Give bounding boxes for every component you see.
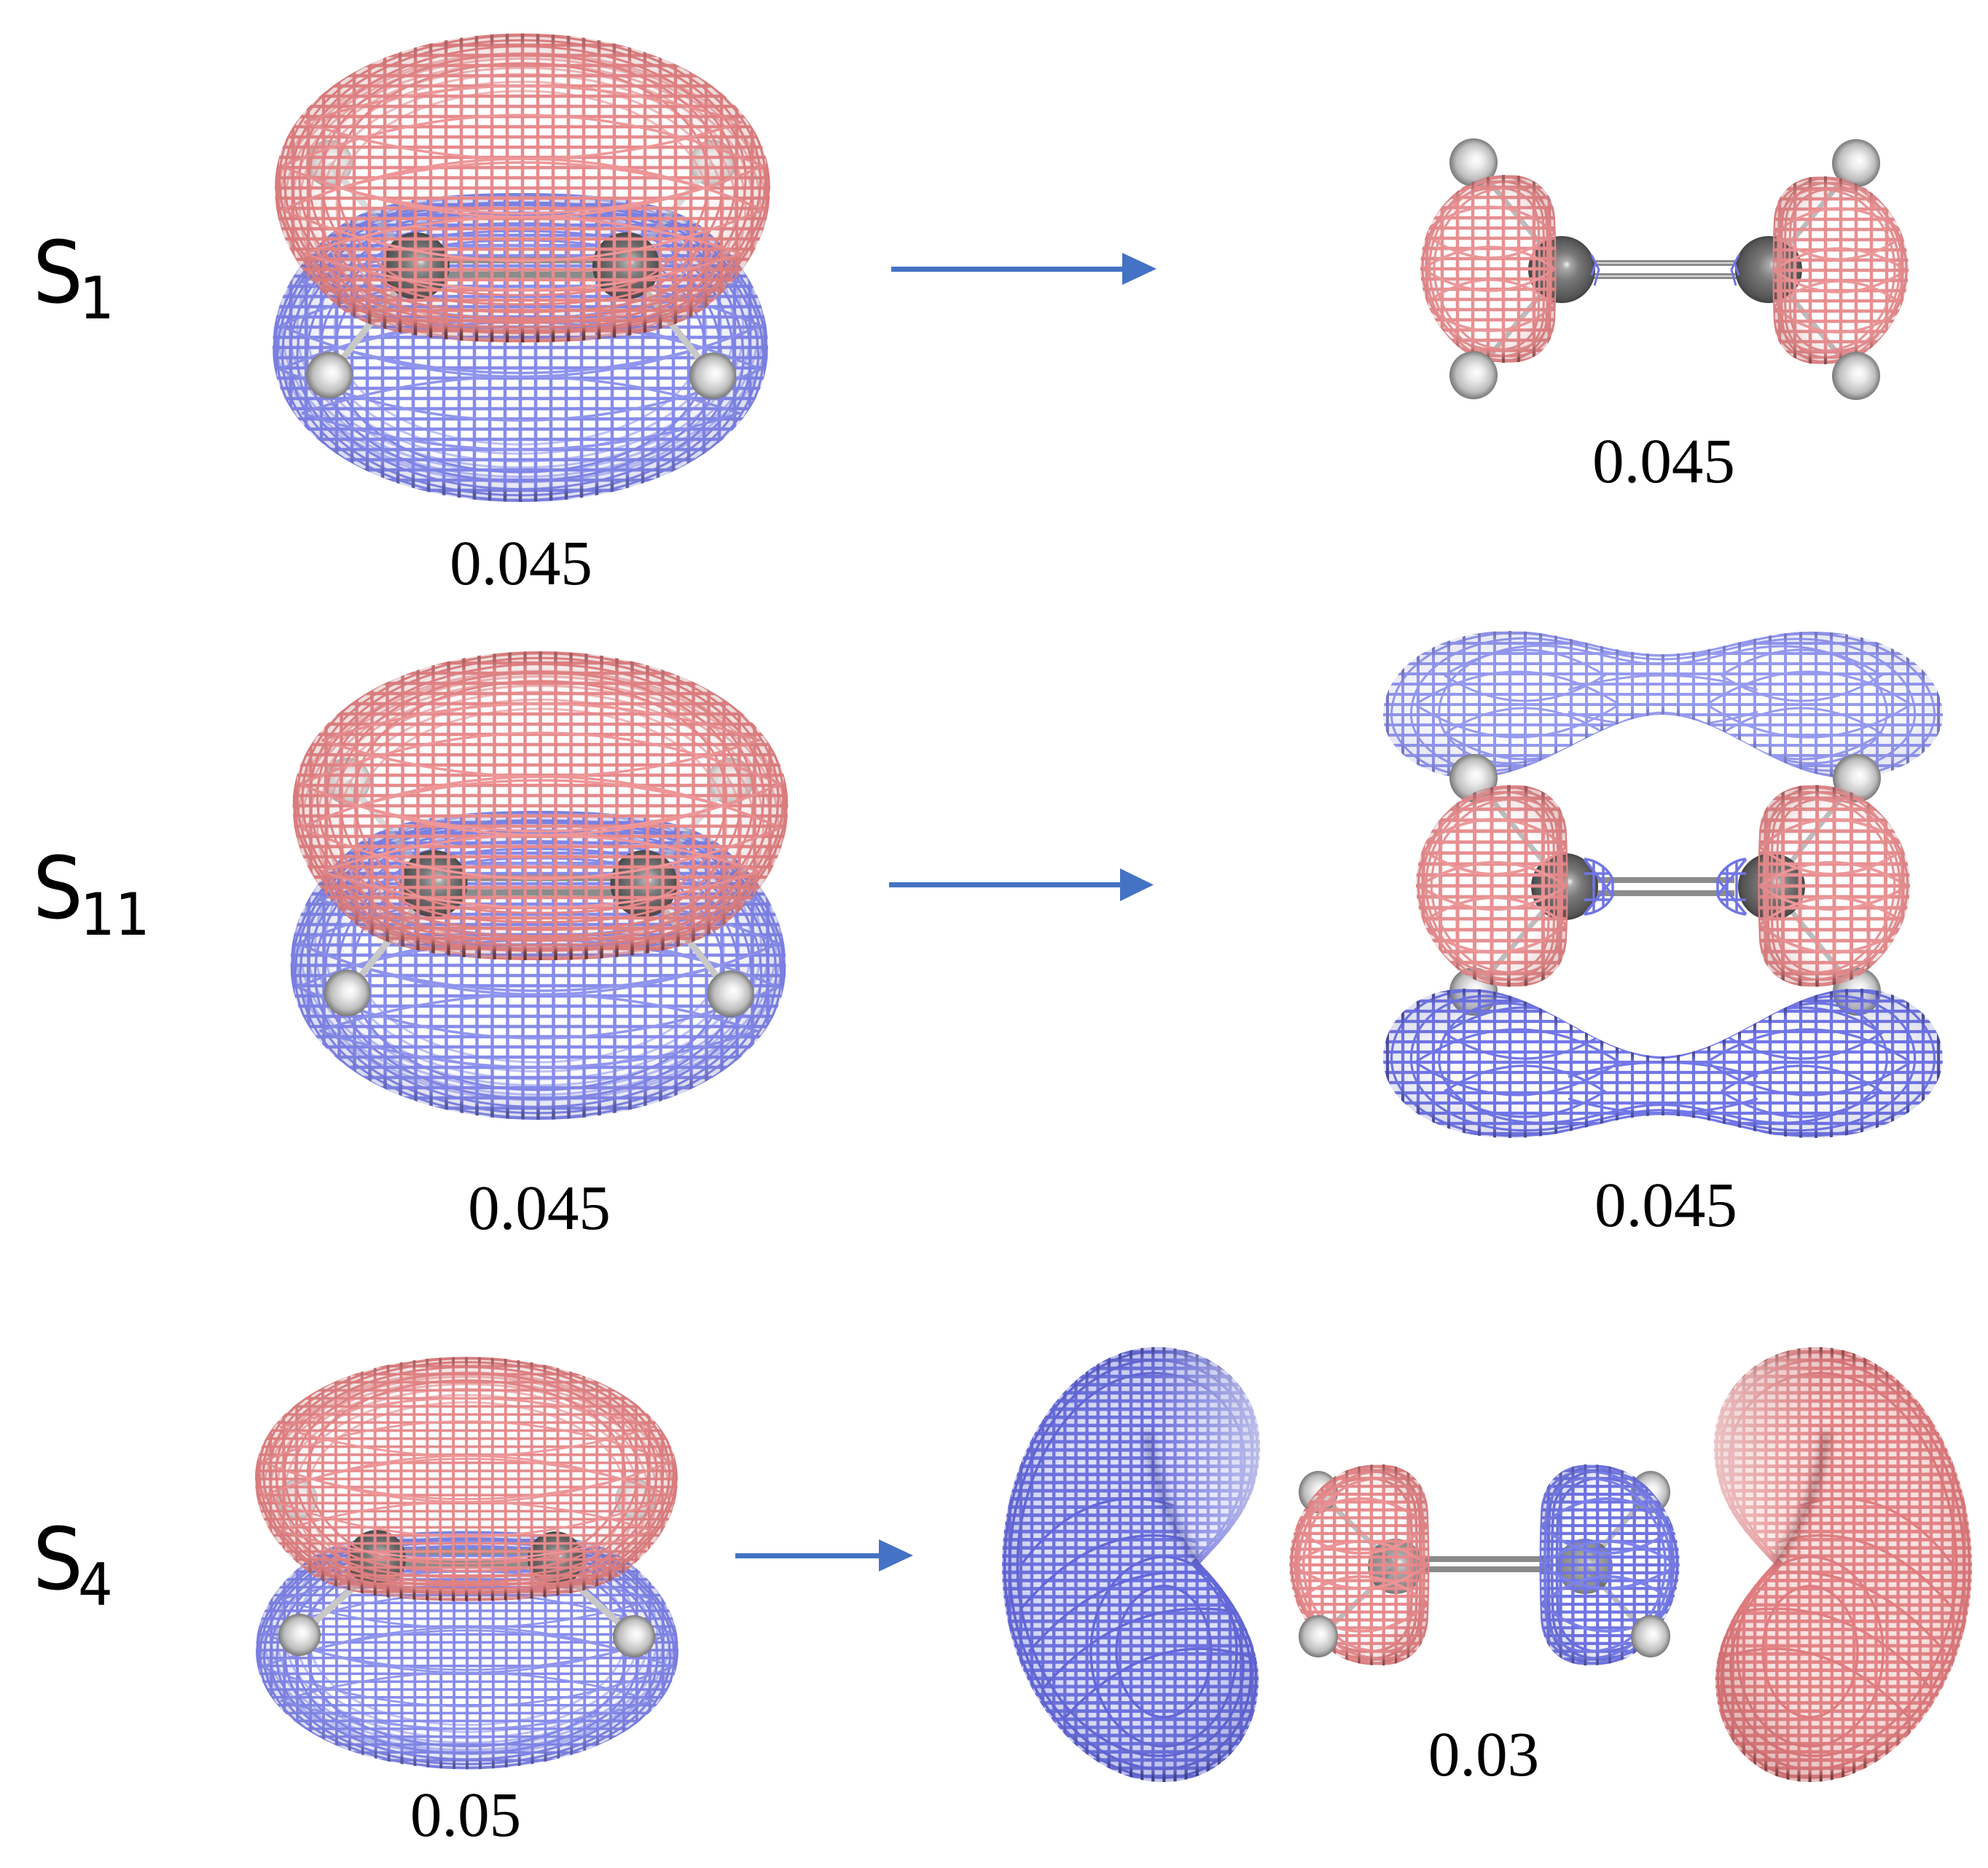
row S1: value for initial orbital: 0.045 [450, 527, 592, 598]
row S1: label: S [33, 223, 83, 323]
C=C double bond [1421, 1559, 1552, 1569]
top blue lobe [1383, 631, 1943, 777]
front C-H bonds [329, 266, 713, 376]
row S4: value for initial orbital: 0.05 [410, 1779, 521, 1850]
carbon atoms [1531, 853, 1805, 920]
back hydrogens [306, 140, 736, 266]
hydrogen bonds [1474, 778, 1857, 992]
row S11: value for initial orbital: 0.045 [468, 1172, 611, 1243]
row S11: value for final orbital: 0.045 [1594, 1169, 1737, 1240]
carbon atoms [383, 232, 660, 299]
C=C double bond [1589, 263, 1742, 276]
small blue cone left [1584, 859, 1613, 914]
row S11: label: S [33, 839, 83, 938]
small red lobe [1114, 1238, 1605, 1868]
row S1: final orbital [1182, 0, 1988, 576]
row S4: arrow [735, 1539, 913, 1571]
right red kidney lobe [1623, 1258, 1988, 1868]
row S4: final orbital [911, 1238, 1988, 1868]
carbon atoms [348, 1530, 583, 1588]
red upper lobe [206, 1237, 727, 1721]
front hydrogens [278, 1614, 655, 1657]
row S1: initial orbital (blue and red lobes with ethylene molecule) [214, 0, 829, 654]
small blue cone right [1718, 859, 1746, 914]
small blue patches [1592, 255, 1739, 286]
left red lobe [1149, 557, 1834, 1214]
blue lower lobe [214, 42, 826, 654]
row S4: label [33, 1510, 113, 1620]
red upper lobe [216, 0, 829, 494]
top hydrogens [1449, 754, 1881, 802]
left red lobe [1182, 0, 1794, 575]
top hydrogens [1449, 138, 1880, 187]
left blue kidney lobe [911, 1258, 1351, 1868]
carbon atoms [1528, 236, 1802, 303]
row S1: label: 1 [79, 265, 114, 333]
row S4: label: 4 [78, 1552, 113, 1620]
C=C double bond [1596, 880, 1734, 893]
row S4: initial orbital [206, 1237, 728, 1868]
carbon atoms [1368, 1539, 1613, 1594]
right red lobe [1492, 557, 1988, 1214]
row S1: label [33, 223, 114, 333]
small blue lobe [1364, 1238, 1855, 1868]
right red lobe [1535, 0, 1988, 576]
row S1: value for final orbital: 0.045 [1592, 425, 1735, 496]
row S4: label: S [33, 1510, 83, 1609]
bottom hydrogens [1299, 1615, 1670, 1657]
row S11: label [33, 839, 150, 949]
blue lower lobe [206, 1414, 728, 1868]
front hydrogens [306, 352, 736, 399]
bottom hydrogens [1449, 351, 1880, 400]
row S11: label: 11 [80, 882, 150, 949]
front C-H bonds [300, 1585, 634, 1636]
bottom hydrogens [1449, 968, 1881, 1016]
row S11: initial orbital [232, 500, 847, 1271]
hydrogen bonds [1474, 162, 1856, 376]
row S11: arrow [889, 868, 1154, 901]
row S1: arrow [891, 253, 1157, 285]
row S11: final orbital [1383, 631, 1943, 1138]
hydrogen bonds [1318, 1492, 1651, 1638]
back hydrogens [277, 1479, 656, 1520]
C=C double bond [434, 260, 609, 275]
row S4: value for final orbital: 0.03 [1428, 1719, 1539, 1789]
bottom blue lobe [1383, 989, 1943, 1138]
C=C bond [394, 1552, 539, 1563]
top hydrogens [1299, 1471, 1670, 1513]
